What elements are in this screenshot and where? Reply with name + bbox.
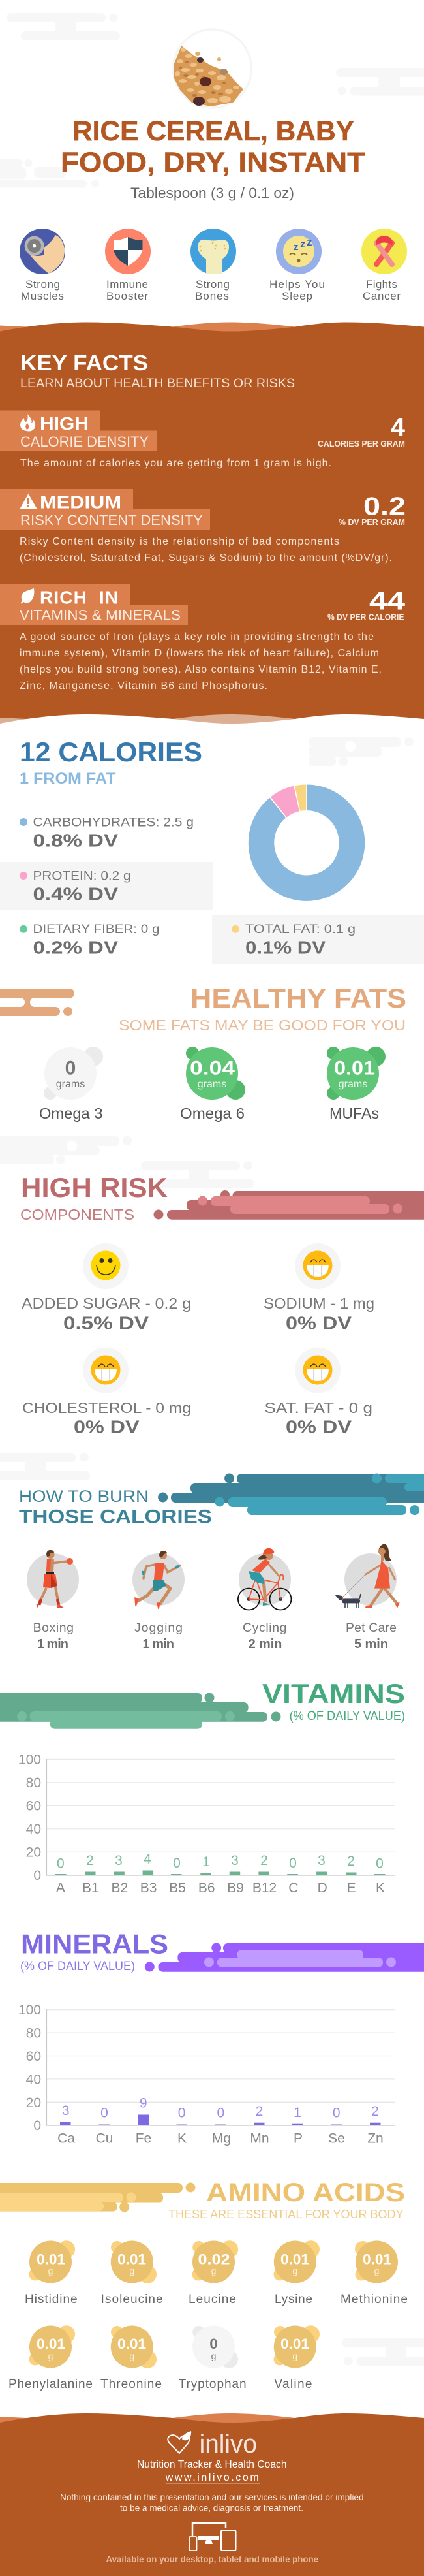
disclaimer	[60, 2492, 364, 2513]
bar chart: minerals: 9	[140, 2096, 147, 2111]
item: total fat: 0.1% DV	[245, 938, 326, 958]
activity: boxing: Boxing	[33, 1621, 74, 1635]
item: dietary fiber	[20, 922, 159, 958]
title: FOOD, DRY, INSTANT	[61, 147, 365, 178]
item: saturated fat: 0% DV	[286, 1417, 352, 1437]
bar chart: minerals: 40	[26, 2073, 41, 2087]
panel: how to burn calories	[0, 1453, 424, 1651]
stat: omega 3: 0	[65, 1058, 76, 1079]
bar chart: minerals	[18, 2003, 395, 2146]
item: total fat	[232, 922, 356, 958]
bar chart: minerals: 0	[217, 2106, 224, 2121]
amino: phenylalanine	[8, 2325, 93, 2391]
heading: how to burn	[19, 1487, 212, 1528]
donut chart	[248, 784, 365, 902]
benefit: strong muscles: Muscles	[21, 290, 64, 302]
bar chart: vitamins: 60	[26, 1798, 41, 1814]
item: protein: 0.4% DV	[33, 884, 118, 904]
panel: healthy fats	[0, 983, 406, 1122]
item: carbohydrates: 0.8% DV	[33, 831, 118, 851]
amino: lysine: Lysine	[275, 2293, 312, 2306]
benefit: immune booster	[105, 229, 151, 302]
amino: tryptophan: Tryptophan	[179, 2377, 247, 2391]
fact: rich in vitamins and minerals: A good source of Iron (plays a key role in providing strength to the	[20, 631, 374, 643]
bar chart: minerals: 80	[26, 2026, 41, 2041]
benefit: strong muscles	[20, 229, 65, 302]
benefit: strong bones: Strong	[196, 278, 230, 291]
bar chart: minerals: Mn	[250, 2131, 269, 2146]
fact: medium risky content density: (Cholesterol, Saturated Fat, Sugars & Sodium) to the amount (%DV/gr).	[20, 552, 392, 564]
fact: rich in vitamins and minerals: immune system), Vitamin D (lowers the risk of heart failure), Calcium	[20, 648, 379, 659]
graphic: banner bars	[158, 1473, 424, 1515]
activity: cycling: 2 min	[249, 1637, 282, 1651]
item: added sugar: ADDED SUGAR - 0.2 g	[22, 1295, 191, 1312]
benefit: fights cancer: Cancer	[363, 290, 401, 302]
fact: high calorie density: 4	[391, 413, 405, 441]
heading: amino acids: AMINO ACIDS	[206, 2178, 405, 2207]
fact: high calorie density: HIGH	[40, 413, 89, 434]
panel: amino acids	[0, 2178, 424, 2391]
bar chart: vitamins: 2	[260, 1853, 268, 1868]
serving size: Tablespoon (3 g / 0.1 oz)	[130, 185, 294, 201]
graphic: banner bars	[145, 1943, 424, 1972]
fact: rich in vitamins and minerals: VITAMINS & MINERALS	[20, 607, 181, 623]
panel: calories	[0, 737, 424, 964]
benefit: strong muscles: Strong	[25, 278, 60, 291]
amino: lysine: g	[292, 2266, 297, 2276]
amino: valine: g	[292, 2351, 297, 2361]
item: cholesterol: 0% DV	[74, 1417, 140, 1437]
disclaimer: to be a medical advice, diagnosis or treatment.	[120, 2504, 303, 2513]
stat: mufas	[327, 1047, 386, 1122]
bar chart: vitamins: B1	[82, 1881, 99, 1896]
bar chart: vitamins: B2	[111, 1881, 128, 1896]
benefit: strong bones: Bones	[195, 290, 229, 302]
bar chart: minerals: 2	[256, 2104, 263, 2119]
stat: mufas: MUFAs	[329, 1105, 379, 1122]
fact: medium risky content density: 0.2	[363, 492, 406, 521]
disclaimer: Nothing contained in this presentation and our services is intended or implied	[60, 2492, 364, 2502]
bar chart: minerals: Mg	[212, 2131, 231, 2146]
amino: histidine: 0.01	[37, 2251, 65, 2267]
fact: high calorie density: The amount of calories you are getting from 1 gram is high.	[20, 458, 331, 469]
amino: lysine: 0.01	[280, 2251, 309, 2267]
amino: leucine	[189, 2240, 238, 2306]
fact: medium risky content density: % DV PER GRAM	[339, 518, 405, 527]
stat: omega 6: grams	[198, 1079, 226, 1090]
fact: medium risky content density: RISKY CONTENT DENSITY	[20, 512, 203, 528]
heading: minerals	[20, 1929, 168, 1973]
activity: jogging	[132, 1551, 185, 1651]
amino: tryptophan	[179, 2326, 247, 2391]
item: cholesterol: CHOLESTEROL - 0 mg	[22, 1399, 191, 1416]
amino: valine: Valine	[274, 2377, 312, 2391]
bar chart: vitamins: E	[347, 1881, 356, 1896]
benefit: immune booster: Booster	[106, 290, 148, 302]
heading: healthy fats: HEALTHY FATS	[190, 983, 406, 1013]
food photo: granola	[174, 29, 252, 108]
amino: valine	[274, 2325, 320, 2391]
website link: www.inlivo.com	[165, 2472, 259, 2483]
bar chart: vitamins: B12	[252, 1881, 277, 1896]
bar chart: vitamins: C	[288, 1881, 298, 1896]
activity: pet care: Pet Care	[346, 1621, 397, 1635]
fact: rich in vitamins and minerals: (helps you build strong bones). Also contains Vitamin B12, Vitamin E,	[20, 664, 382, 675]
graphic: banner bars	[154, 1190, 424, 1220]
panel: minerals	[18, 1929, 424, 2146]
bar chart: minerals: 100	[18, 2003, 41, 2018]
tagline: Nutrition Tracker & Health Coach	[137, 2459, 287, 2470]
bar chart: vitamins	[18, 1753, 395, 1896]
fact: rich in vitamins and minerals: RICH IN	[40, 588, 118, 607]
bar chart: vitamins: 4	[144, 1852, 151, 1867]
item: carbohydrates	[20, 816, 194, 851]
amino: isoleucine	[101, 2241, 163, 2306]
bar chart: minerals: 20	[26, 2095, 41, 2110]
bar chart: minerals: 0	[333, 2106, 341, 2121]
stat: omega 6: 0.04	[190, 1058, 235, 1079]
benefit: helps you sleep: z	[307, 236, 312, 248]
heading: high risk: HIGH RISK	[21, 1172, 168, 1203]
activity: cycling: Cycling	[243, 1621, 287, 1635]
amino: isoleucine: g	[129, 2266, 134, 2276]
bar chart: minerals: P	[294, 2131, 303, 2146]
bar chart: vitamins: 80	[26, 1775, 41, 1790]
stat: mufas: 0.01	[334, 1058, 375, 1079]
stat: mufas: grams	[339, 1079, 367, 1090]
bar chart: vitamins: 20	[26, 1845, 41, 1860]
bar chart: minerals: 0	[100, 2106, 108, 2121]
bar chart: vitamins: 0	[376, 1856, 384, 1871]
heading: how to burn: HOW TO BURN	[19, 1487, 149, 1506]
amino: valine: 0.01	[280, 2336, 309, 2352]
heading: key facts: KEY FACTS	[20, 351, 148, 375]
bar chart: vitamins: 40	[26, 1822, 41, 1837]
amino: methionine: Methionine	[341, 2293, 408, 2306]
amino: isoleucine: 0.01	[117, 2251, 146, 2267]
bar chart: minerals: Cu	[96, 2131, 113, 2146]
availability note: Available on your desktop, tablet and mobile phone	[106, 2554, 318, 2564]
amino: phenylalanine: 0.01	[37, 2336, 65, 2352]
heading: minerals: MINERALS	[21, 1929, 168, 1960]
bar chart: vitamins: 0	[289, 1856, 297, 1871]
amino: methionine: 0.01	[363, 2251, 391, 2267]
graphic: banner bars	[0, 989, 78, 1016]
item: total fat: TOTAL FAT: 0.1 g	[245, 922, 356, 936]
amino: isoleucine: Isoleucine	[101, 2293, 163, 2306]
bar chart: minerals: Fe	[136, 2131, 151, 2146]
title: RICE CEREAL, BABY	[72, 116, 354, 147]
fact: high calorie density: CALORIE DENSITY	[20, 434, 149, 450]
stat: omega 3: grams	[56, 1079, 85, 1090]
item: added sugar	[22, 1243, 191, 1333]
header section	[0, 13, 424, 302]
bar chart: vitamins: B9	[227, 1881, 244, 1896]
bar chart: vitamins: A	[56, 1881, 65, 1896]
bar chart: minerals: 0	[33, 2118, 41, 2133]
item: dietary fiber: 0.2% DV	[33, 938, 118, 958]
panel: key facts	[0, 323, 424, 734]
item: sodium	[264, 1243, 374, 1333]
item: protein background	[0, 862, 213, 910]
amino: methionine	[341, 2241, 408, 2306]
heading: calories	[20, 737, 202, 787]
benefit: fights cancer: Fights	[366, 278, 397, 291]
stat: omega 3	[39, 1047, 103, 1122]
item: protein: PROTEIN: 0.2 g	[33, 869, 130, 883]
fact: medium risky content density	[0, 489, 406, 564]
amino: leucine: g	[211, 2266, 216, 2276]
bar chart: vitamins: B6	[198, 1881, 215, 1896]
heading: amino acids	[168, 2178, 405, 2221]
heading: calories: 1 FROM FAT	[20, 770, 116, 787]
fact: rich in vitamins and minerals: % DV PER CALORIE	[327, 612, 404, 622]
fact: medium risky content density: Risky Content density is the relationship of bad components	[20, 536, 339, 547]
benefit: helps you sleep: Helps You	[269, 278, 325, 291]
heading: high risk	[20, 1172, 168, 1223]
amino: histidine: g	[48, 2266, 53, 2276]
bar chart: minerals: K	[177, 2131, 187, 2146]
icon: devices	[189, 2523, 236, 2551]
heading: key facts: LEARN ABOUT HEALTH BENEFITS OR RISKS	[20, 377, 295, 390]
heading: vitamins	[262, 1678, 405, 1723]
fact: rich in vitamins and minerals: Zinc, Manganese, Vitamin B6 and Phosphorus.	[20, 680, 267, 692]
fact: high calorie density: CALORIES PER GRAM	[318, 439, 405, 449]
bar chart: vitamins: 3	[231, 1853, 239, 1868]
amino: lysine	[274, 2240, 320, 2306]
bar chart: vitamins: 1	[202, 1854, 210, 1869]
footer	[0, 2413, 424, 2576]
item: carbohydrates: CARBOHYDRATES: 2.5 g	[33, 816, 194, 830]
bar chart: vitamins: 3	[318, 1853, 326, 1868]
amino: methionine: g	[374, 2266, 379, 2276]
item: dietary fiber: DIETARY FIBER: 0 g	[33, 922, 159, 936]
item: saturated fat: SAT. FAT - 0 g	[265, 1399, 372, 1416]
bar chart: minerals: Se	[328, 2131, 345, 2146]
heading: healthy fats	[119, 983, 406, 1034]
benefit: helps you sleep: z	[294, 242, 299, 253]
item: cholesterol	[22, 1348, 191, 1437]
benefit: helps you sleep: z	[300, 239, 305, 250]
benefit: helps you sleep	[269, 229, 325, 302]
activity: cycling	[238, 1548, 291, 1651]
amino: threonine: Threonine	[100, 2377, 162, 2391]
benefit: strong bones	[190, 229, 236, 302]
amino: leucine: Leucine	[189, 2293, 236, 2306]
benefit: fights cancer	[361, 229, 407, 302]
graphic: banner bars	[0, 2182, 196, 2212]
item: protein	[20, 869, 130, 904]
bar chart: minerals: 0	[178, 2106, 185, 2121]
bar chart: vitamins: 0	[33, 1868, 41, 1883]
activity: pet care	[335, 1544, 400, 1651]
bar chart: minerals: Ca	[57, 2131, 75, 2146]
heading: key facts	[20, 351, 295, 390]
panel: vitamins	[0, 1678, 405, 1896]
item: saturated fat	[265, 1348, 372, 1437]
bar chart: vitamins: D	[318, 1881, 327, 1896]
logo: inlivo	[168, 2430, 257, 2458]
amino: threonine	[100, 2326, 162, 2391]
bar chart: minerals: Zn	[367, 2131, 384, 2146]
item: total fat background	[212, 915, 424, 964]
amino: threonine: 0.01	[117, 2336, 146, 2352]
heading: high risk: COMPONENTS	[20, 1206, 134, 1223]
title	[61, 116, 365, 178]
stat: omega 3: Omega 3	[39, 1105, 103, 1122]
fact: rich in vitamins and minerals: 44	[369, 588, 405, 615]
amino: tryptophan: 0	[209, 2336, 218, 2352]
heading: vitamins: VITAMINS	[262, 1678, 405, 1709]
bar chart: vitamins: 100	[18, 1753, 41, 1767]
heading: vitamins: (% OF DAILY VALUE)	[290, 1709, 405, 1723]
heading: minerals: (% OF DAILY VALUE)	[20, 1960, 135, 1973]
item: sodium: SODIUM - 1 mg	[264, 1295, 374, 1312]
amino: phenylalanine: g	[48, 2351, 53, 2361]
bar chart: vitamins: K	[376, 1881, 385, 1896]
fact: high calorie density	[0, 410, 405, 469]
bar chart: vitamins: B3	[140, 1881, 157, 1896]
item: added sugar: 0.5% DV	[63, 1312, 149, 1333]
benefit: immune booster: Immune	[106, 278, 148, 291]
bar chart: vitamins: B5	[169, 1881, 186, 1896]
amino: histidine: Histidine	[25, 2293, 78, 2306]
amino: tryptophan: g	[211, 2351, 216, 2361]
heading: calories: 12 CALORIES	[20, 737, 202, 767]
fact: rich in vitamins and minerals	[0, 584, 405, 692]
heading: how to burn: THOSE CALORIES	[19, 1506, 212, 1528]
amino: phenylalanine: Phenylalanine	[8, 2377, 93, 2391]
benefit: helps you sleep: Sleep	[282, 290, 312, 302]
amino: histidine	[25, 2240, 78, 2306]
activity: jogging: 1 min	[142, 1637, 174, 1651]
panel: high risk components	[0, 1136, 424, 1437]
activity: boxing: 1 min	[37, 1637, 68, 1651]
item: sodium: 0% DV	[286, 1312, 352, 1333]
heading: amino acids: THESE ARE ESSENTIAL FOR YOUR BODY	[168, 2207, 404, 2221]
amino: leucine: 0.02	[198, 2251, 230, 2267]
graphic: banner bars	[0, 1693, 280, 1729]
bar chart: vitamins: 2	[86, 1853, 94, 1868]
bar chart: vitamins: 0	[173, 1856, 181, 1871]
bar chart: vitamins: 2	[347, 1854, 355, 1869]
bar chart: vitamins: 3	[115, 1853, 123, 1868]
activity: pet care: 5 min	[354, 1637, 388, 1651]
logo: inlivo: inlivo	[200, 2430, 257, 2458]
fact: medium risky content density: MEDIUM	[40, 492, 121, 512]
bar chart: minerals: 3	[62, 2103, 70, 2118]
activity: boxing	[27, 1550, 79, 1651]
bar chart: minerals: 2	[371, 2104, 379, 2119]
bar chart: minerals: 1	[294, 2105, 301, 2120]
stat: omega 6	[180, 1047, 245, 1122]
bar chart: minerals: 60	[26, 2049, 41, 2064]
amino: threonine: g	[129, 2351, 134, 2361]
activity: jogging: Jogging	[134, 1621, 183, 1635]
bar chart: vitamins: 0	[57, 1856, 65, 1871]
stat: omega 6: Omega 6	[180, 1105, 245, 1122]
heading: healthy fats: SOME FATS MAY BE GOOD FOR YOU	[119, 1017, 406, 1034]
